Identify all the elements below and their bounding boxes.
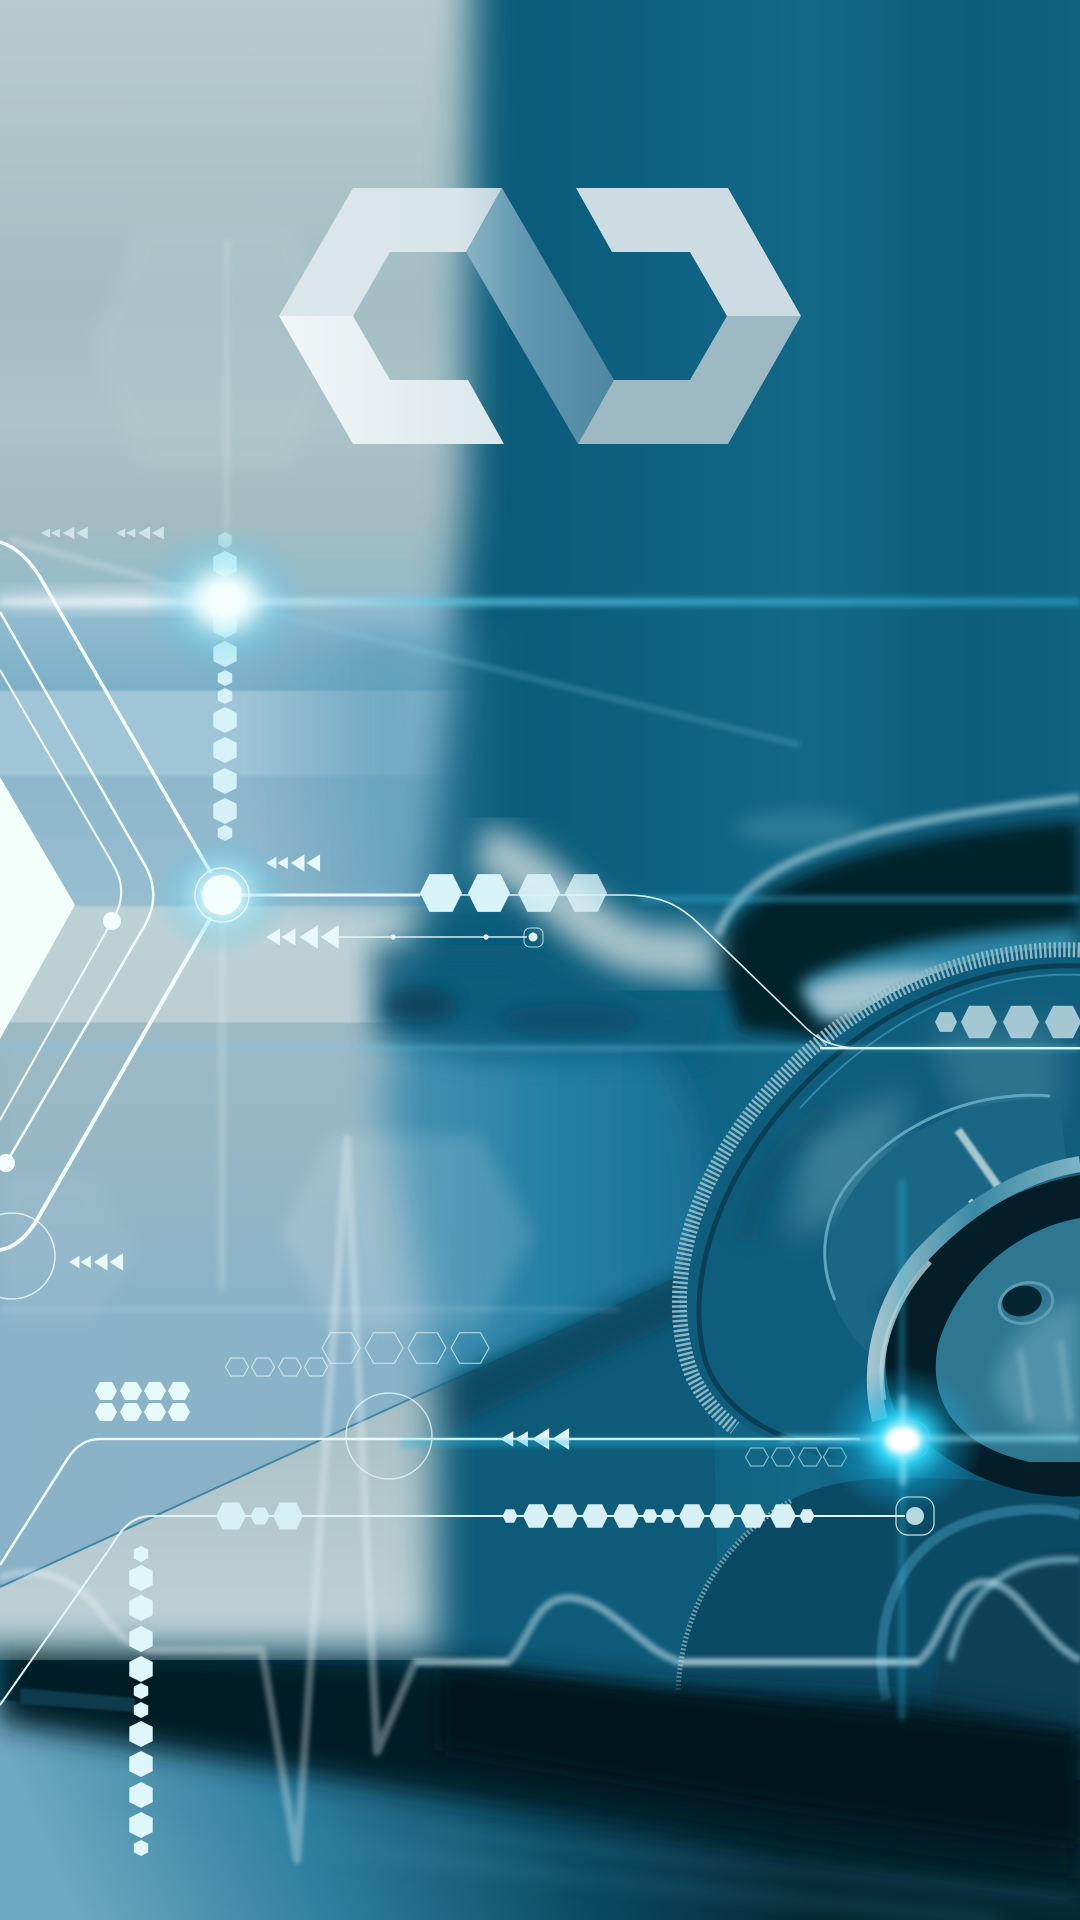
blurred dark shapes behind the node line <box>372 850 720 1058</box>
top flare core <box>191 570 259 630</box>
node core <box>202 875 242 915</box>
lens flare: lower horizontal streaks <box>0 896 1080 1311</box>
connector end node <box>528 932 538 942</box>
flare: faint horizontal <box>0 1308 620 1311</box>
neck cylinder <box>827 1099 1080 1370</box>
disc highlights <box>790 1090 910 1240</box>
bright line at right <box>820 1047 1080 1049</box>
small connector under main line <box>339 928 543 947</box>
outline hexagons near lower flare <box>746 1448 846 1466</box>
arrows: top pair 1 <box>41 527 88 539</box>
arrows: lower left <box>69 1253 123 1271</box>
flare: streak <box>780 1436 1080 1441</box>
glow: main node <box>152 833 292 957</box>
stethoscope chest piece, lower reflection <box>676 1478 1080 1760</box>
node ring <box>195 868 249 922</box>
line hexagons <box>420 874 607 912</box>
table edge hairline <box>0 1377 459 1588</box>
inner dark cavity <box>886 1175 1080 1496</box>
large white chevron <box>0 777 75 1039</box>
beam below node <box>219 900 225 1290</box>
logo: bottom right arm <box>578 316 801 444</box>
circuit: inner line <box>0 670 121 1120</box>
arrows: above line <box>266 854 320 872</box>
logo: bottom left arm <box>279 316 504 444</box>
arrows: on lower line <box>500 1428 569 1450</box>
photo background: table <box>0 1030 720 1680</box>
glow: lower cyan flare <box>780 1366 1080 1514</box>
arrows: below line <box>266 925 339 949</box>
hexagons on lower line two <box>216 1502 814 1530</box>
lens hole <box>999 1282 1045 1320</box>
flat segment highlight <box>415 1659 918 1665</box>
soft background hexagons <box>0 225 535 1330</box>
end node frame <box>896 1497 934 1535</box>
stethoscope chest piece, main disc <box>679 948 1080 1496</box>
lower line one <box>0 1439 920 1565</box>
vertical light beams <box>219 240 905 1720</box>
arrows: top pair 2 <box>116 527 164 539</box>
floor <box>0 1700 1080 1920</box>
glow: top flare <box>141 524 309 676</box>
reflection inner lens <box>882 1509 1080 1700</box>
dark shadow band <box>0 1640 1080 1890</box>
light metal band <box>800 925 1080 1020</box>
underside of table edge <box>0 1262 720 1680</box>
logo: top left arm <box>279 188 502 316</box>
curve to right <box>420 895 1080 1048</box>
outline hexagons, small <box>226 1358 328 1376</box>
circuit: lower outer line <box>0 917 211 1250</box>
tube shadow <box>717 820 1080 1040</box>
lower dot <box>0 1154 15 1172</box>
left soft hexagon <box>0 1175 140 1325</box>
connector dots <box>390 934 396 940</box>
main horizontal line with curve <box>222 895 1080 1048</box>
rim inner ring <box>699 966 1080 1442</box>
central soft hexagon <box>280 1135 535 1330</box>
neck highlights <box>958 1130 1002 1192</box>
heartbeat wave <box>0 1139 1080 1860</box>
lens flare: top horizontal streak <box>0 540 1080 745</box>
vertical hexagon chain, top <box>213 532 237 841</box>
flare: diagonal streak <box>265 612 800 745</box>
circuit: outer chevron line <box>0 542 211 1250</box>
upper soft hexagon <box>90 225 345 470</box>
disc body <box>679 948 1080 1480</box>
end node on lower line two <box>896 1497 934 1535</box>
flare core <box>886 1428 920 1452</box>
darkest spot <box>384 987 456 1023</box>
beam through lower flare <box>899 1180 905 1720</box>
circuit nodes <box>0 912 121 1172</box>
table edge shadow <box>446 1272 700 1430</box>
lower line two <box>0 1516 905 1705</box>
blue shading inside the veil <box>240 630 510 910</box>
hexagon grid <box>95 1382 190 1421</box>
logo: top right arm <box>576 188 801 316</box>
tabletop <box>0 1030 708 1587</box>
tube highlight <box>717 798 1080 935</box>
flare: left diagonal streak <box>10 540 225 600</box>
flare frame <box>885 1421 929 1459</box>
circuit circle, lower left <box>0 1213 55 1299</box>
reflection disc <box>676 1478 1080 1760</box>
floor streaks <box>100 1800 1080 1920</box>
arrow groups <box>41 527 569 1450</box>
blurred white tube band <box>480 850 715 958</box>
ring on lower line <box>346 1393 432 1479</box>
flare: mid horizontal <box>0 1046 1080 1050</box>
reflection dome <box>930 1550 1080 1740</box>
outline hexagons, large <box>322 1333 489 1363</box>
lower line one: cyan glow <box>400 1440 920 1446</box>
flare: vertical streak <box>900 1395 906 1485</box>
grey blurred reflection <box>803 969 960 1020</box>
reflection rim <box>678 1500 792 1690</box>
knurled rim <box>679 950 1080 1428</box>
upper soft shape <box>735 810 865 846</box>
stethoscope tube <box>717 798 1080 1040</box>
flare bloom <box>823 1366 983 1514</box>
second dark spot <box>500 1004 640 1036</box>
flare: soft left streak <box>0 589 280 611</box>
hexagons at right <box>935 1006 1080 1038</box>
circuit: middle line <box>0 612 153 1160</box>
dark surface and floor <box>0 1640 1080 1920</box>
lower veil below the table edge <box>0 1384 460 1660</box>
translucent left veil <box>0 0 502 1660</box>
logo: diagonal <box>466 188 614 444</box>
vertical hexagon chain, bottom <box>129 1546 153 1856</box>
laptop bar <box>20 1688 135 1712</box>
thick ring <box>875 1164 1080 1420</box>
inner lens plate <box>936 1218 1080 1462</box>
logo <box>279 188 801 444</box>
